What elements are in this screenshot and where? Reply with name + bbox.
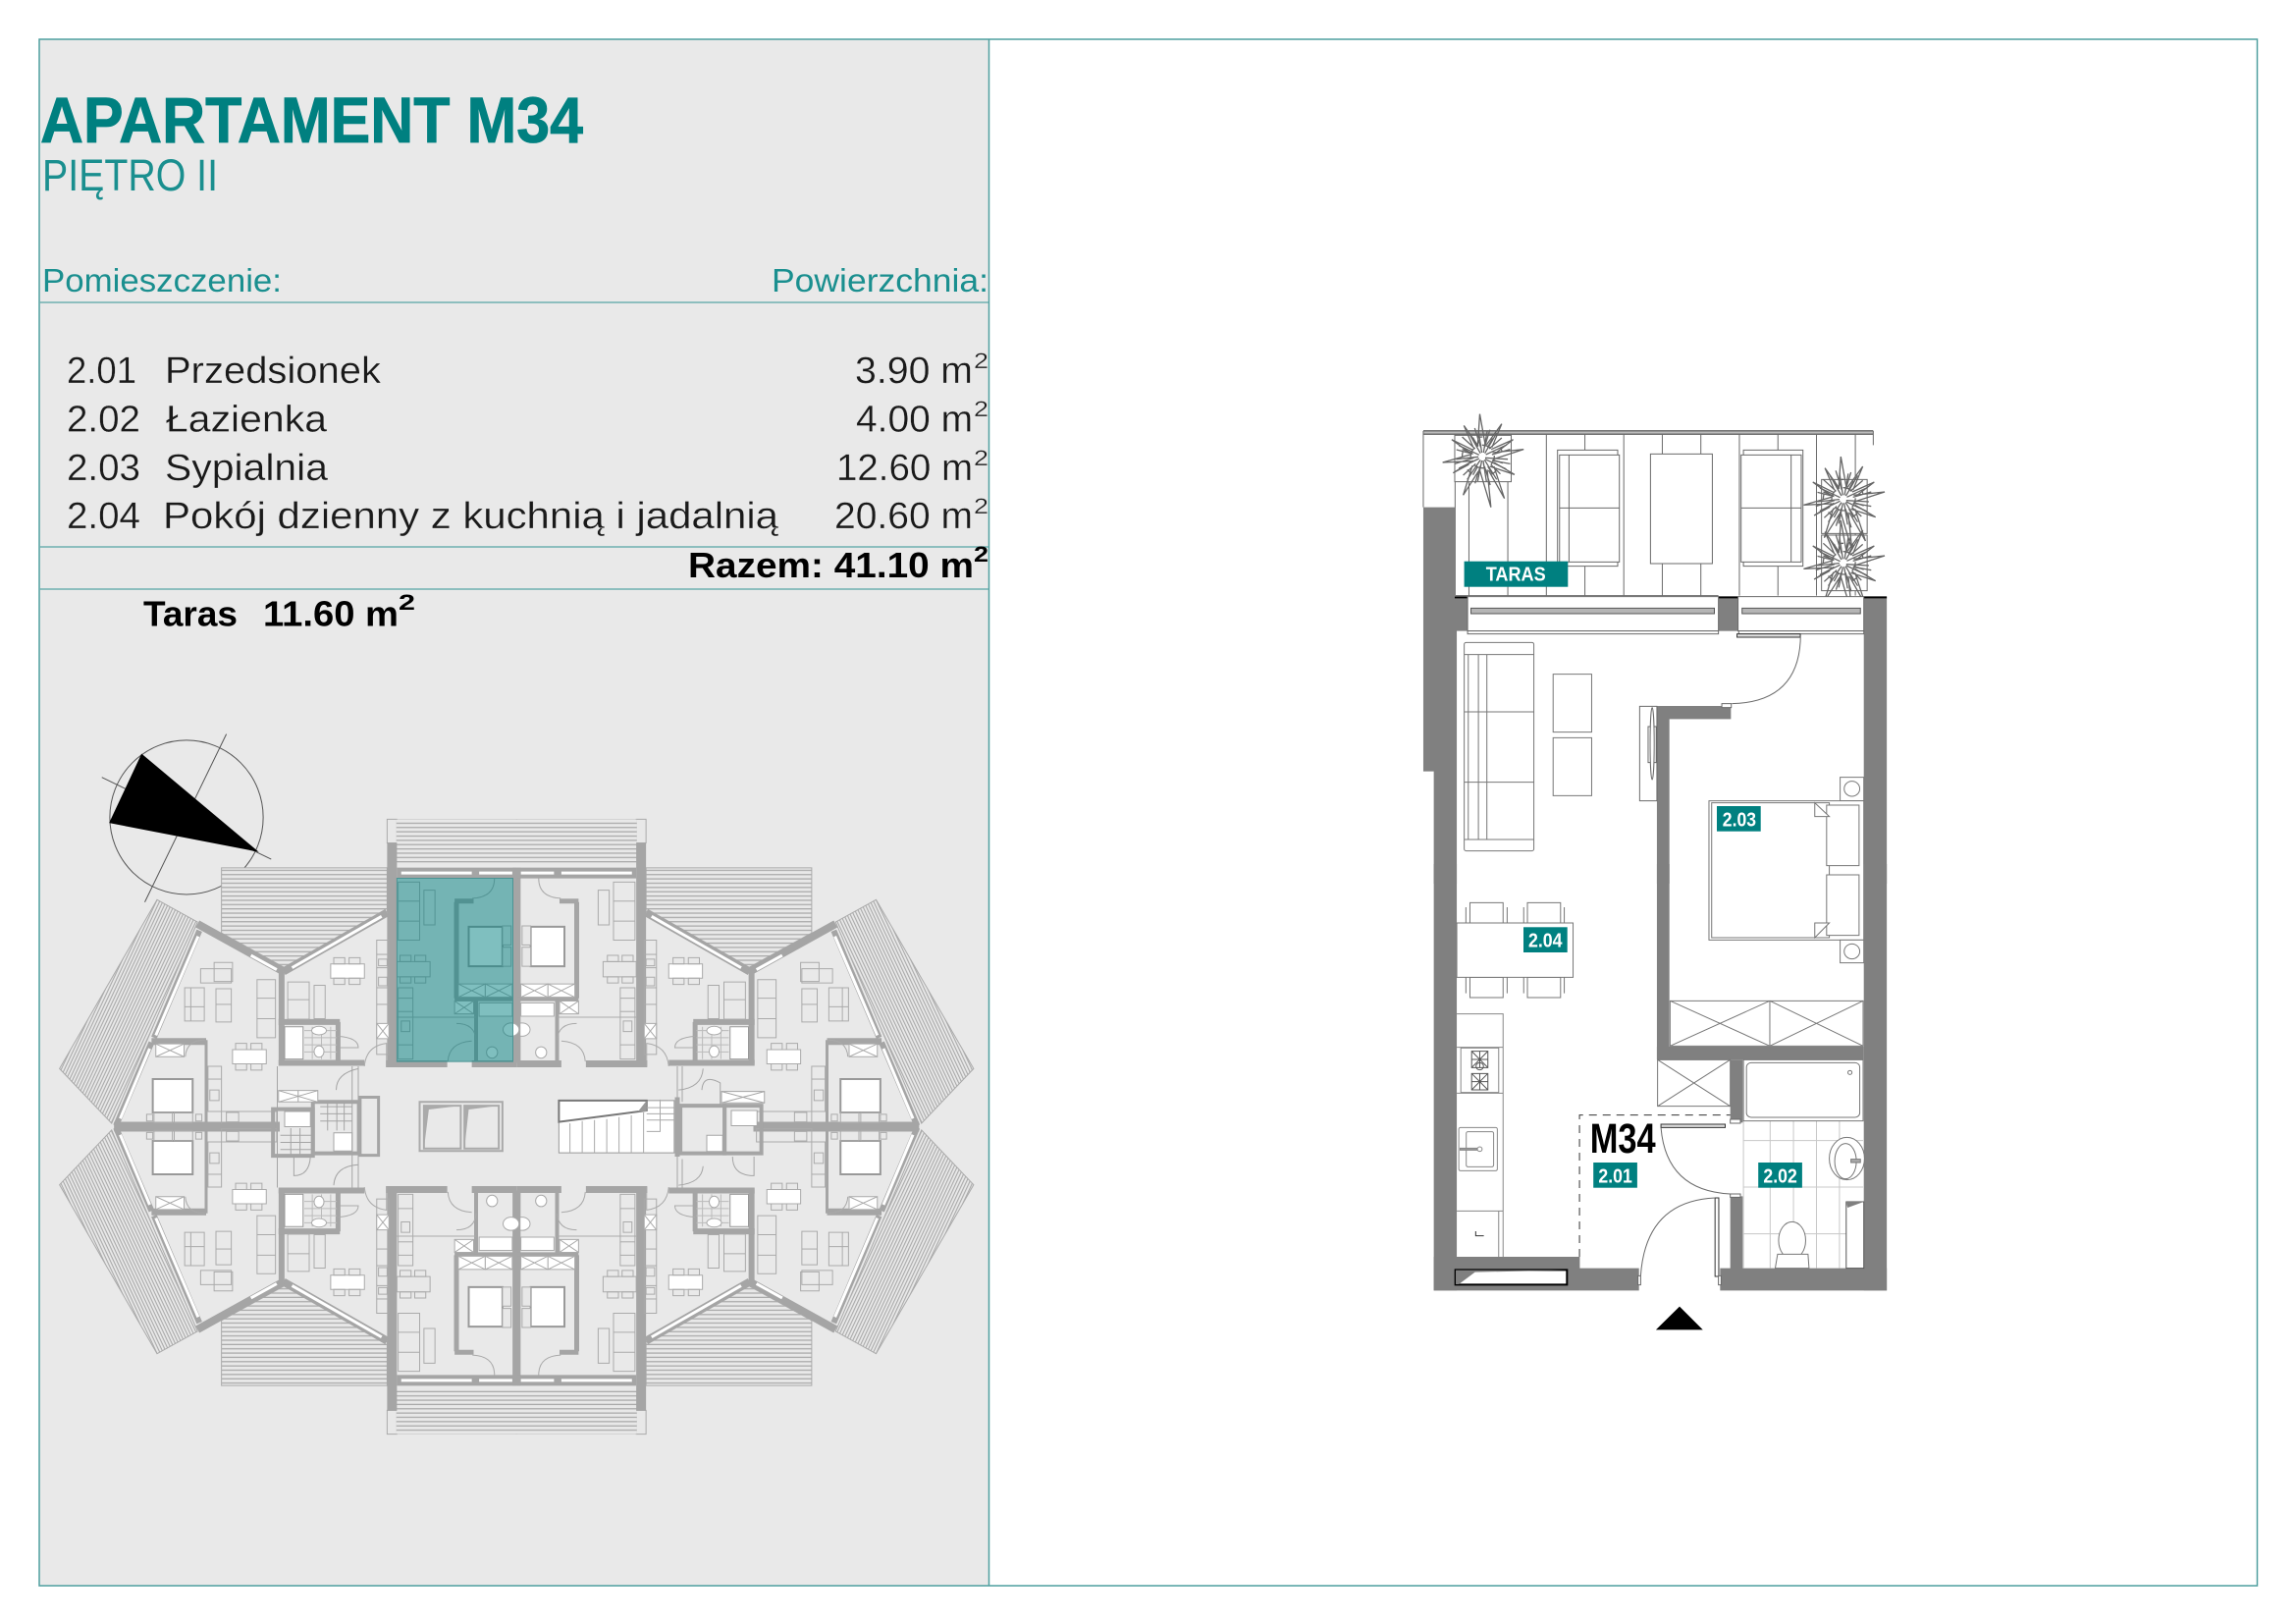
bedroom night table upper: [1841, 778, 1864, 801]
main apartment plan: [1423, 414, 1887, 1329]
dining table: [1457, 902, 1574, 998]
table header: Pomieszczenie:: [42, 262, 282, 298]
terrace area: 2: [399, 590, 415, 615]
room table rows: Przedsionek: [165, 351, 382, 392]
room tag: 2.01: 2.01: [1598, 1165, 1632, 1187]
toilet: [1775, 1221, 1809, 1269]
entrance door: [1638, 1198, 1721, 1285]
room table rows: 2: [974, 349, 988, 373]
entrance arrow: [1656, 1307, 1703, 1329]
terrace windows: [1455, 597, 1887, 634]
balcony door: [1722, 634, 1800, 708]
west wedge flat: [331, 964, 364, 978]
TV unit: [1639, 706, 1657, 801]
north-west terrace: [222, 868, 387, 968]
kitchen counter: [1457, 1014, 1503, 1257]
terrace: [1423, 431, 1873, 596]
table header: Powierzchnia:: [772, 262, 988, 298]
plant: east upper: [1803, 457, 1885, 550]
bathroom door: [1661, 1119, 1740, 1197]
table header: [42, 262, 988, 298]
night table lower: [1841, 940, 1864, 963]
far west flat: [233, 1050, 266, 1064]
highlighted apartment M34: [397, 878, 512, 1061]
room table rows: Sypialnia: [165, 448, 329, 489]
compass: [102, 734, 271, 902]
room tag: TARAS: TARAS: [1486, 565, 1546, 586]
table rules: [39, 302, 988, 589]
core: lifts: [420, 1102, 503, 1151]
left info panel background: [39, 39, 989, 1586]
terrace area: [143, 590, 415, 634]
hall wardrobe: [1658, 1059, 1731, 1107]
room tag: 2.03: 2.03: [1723, 810, 1756, 832]
core: east service rooms: [677, 1066, 765, 1188]
bedroom wardrobe: [1670, 1001, 1863, 1046]
room table rows: 2.02: [67, 399, 140, 440]
plant: north-west: [1443, 414, 1523, 508]
terrace sofa left: [1558, 450, 1620, 567]
shaft: [1456, 1270, 1567, 1284]
total area: Razem: 41.10 m: [688, 545, 974, 585]
bathroom shaft: [1846, 1202, 1864, 1269]
terrace sofa right: [1741, 450, 1803, 567]
core: staircase: [559, 1100, 674, 1153]
sofa: [1465, 642, 1534, 851]
mirrored quadrants: [503, 819, 974, 1126]
apartment label M34: M34: [1590, 1115, 1656, 1163]
dashed boundary of hall: [1579, 1115, 1731, 1257]
room table rows: 2: [974, 494, 988, 518]
room table rows: 3.90 m: [855, 351, 973, 392]
total area: 2: [974, 542, 988, 567]
terrace area: 11.60 m: [263, 593, 399, 634]
title: APARTAMENT M34: [40, 83, 583, 156]
far west terrace: [60, 899, 197, 1123]
washbasin: [1830, 1137, 1864, 1180]
room table rows: 2.03: [67, 448, 140, 489]
top terrace: [387, 819, 397, 843]
bathroom tiles: [1743, 1121, 1863, 1269]
bathtub: [1743, 1059, 1863, 1121]
room tag: 2.04: 2.04: [1528, 930, 1563, 951]
room table rows: [67, 349, 988, 537]
plant pots: [1455, 435, 1867, 591]
structural walls upper: [1423, 508, 1887, 884]
building key plan: [60, 734, 974, 1435]
exterior walls: [114, 842, 516, 1126]
room tag: 2.02: 2.02: [1763, 1165, 1797, 1187]
room tag: TARAS: [1465, 562, 1568, 587]
room table rows: 12.60 m: [836, 448, 973, 489]
room table rows: 2.01: [67, 351, 136, 392]
room table rows: 2.04: [67, 496, 140, 537]
room table rows: 2: [974, 446, 988, 470]
room table rows: Pokój dzienny z kuchnią i jadalnią: [163, 496, 779, 537]
room table rows: 2: [974, 397, 988, 421]
room table rows: 4.00 m: [856, 399, 973, 440]
furniture and rooms: [146, 878, 530, 1125]
window strips: [120, 873, 512, 1118]
room table rows: 20.60 m: [834, 496, 973, 537]
subtitle: floor: PIĘTRO II: [42, 150, 218, 200]
coffee tables: [1553, 675, 1591, 795]
plant: east lower: [1803, 520, 1885, 614]
core: west service rooms: [273, 1066, 379, 1188]
terrace area: Taras: [143, 593, 238, 634]
terrace table: [1650, 454, 1712, 564]
room table rows: Łazienka: [166, 399, 328, 440]
walls lower: [1434, 864, 1887, 1290]
bed: [1709, 801, 1864, 940]
